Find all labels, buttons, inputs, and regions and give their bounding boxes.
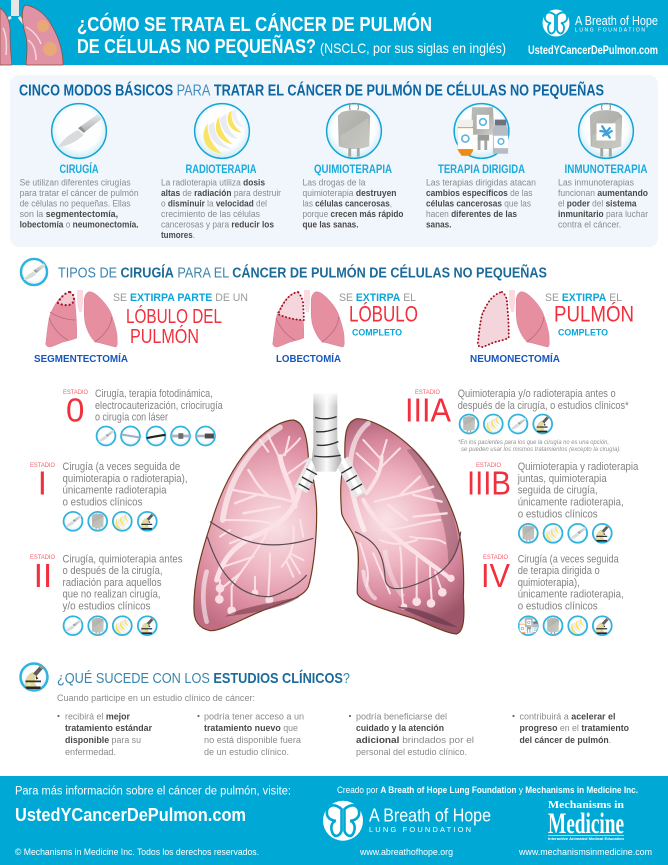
treatment: terapia dirigida bbox=[426, 104, 536, 230]
treatment icons bbox=[519, 523, 612, 543]
clinical trials benefit 2: tratamiento nuevo que bbox=[204, 723, 298, 734]
surgery: segmentectomía: SEGMENTECTOMÍA bbox=[34, 352, 128, 365]
treatment: terapia dirigida: sanas. bbox=[426, 220, 452, 230]
footnote: se pueden usar los mismos tratamientos (excepto la cirugía). bbox=[461, 446, 621, 453]
stage I: ESTADIO bbox=[30, 463, 55, 469]
treatment: quimioterapia: las células cancerosas, bbox=[302, 198, 392, 210]
stage IV: IV bbox=[481, 557, 510, 594]
stage IIIA: IIIA bbox=[405, 392, 451, 428]
treatment: cirugía: CIRUGÍA bbox=[60, 161, 99, 176]
stage II: y/o estudios clínicos bbox=[62, 601, 150, 613]
surgery: segmentectomía: SE EXTIRPA PARTE DE UN bbox=[113, 292, 248, 304]
logo: A Breath of Hope footer: LUNG FOUNDATION bbox=[369, 825, 471, 834]
treatment: inmunoterapia: funcionan aumentando bbox=[558, 188, 648, 199]
treatment: cirugía: Se utilizan diferentes cirugías bbox=[20, 178, 131, 188]
footer: more information: Para más información sobre el cáncer de pulmón, visite: bbox=[15, 786, 291, 798]
treatment icons bbox=[64, 511, 157, 531]
footer: credits: Creado por A Breath of Hope Lung Foundation y Mechanisms in Medicine Inc. bbox=[337, 785, 638, 795]
surgery: lobectomía: COMPLETO bbox=[352, 328, 402, 338]
stage 0: electrocauterización, criocirugía bbox=[95, 400, 223, 412]
stage I: Cirugía (a veces seguida de bbox=[62, 461, 180, 473]
surgery: neumonectomía: COMPLETO bbox=[558, 328, 608, 338]
stage II: Cirugía, quimioterapia antes bbox=[62, 553, 182, 565]
icon: microscope bbox=[20, 664, 48, 690]
surgery: neumonectomía bbox=[470, 290, 634, 365]
stage 0: o cirugía con láser bbox=[95, 412, 168, 424]
treatment: quimioterapia: porque crecen más rápido bbox=[302, 209, 404, 220]
surgery: segmentectomía bbox=[34, 290, 248, 365]
clinical trials benefit 4: contribuirá a acelerar el bbox=[520, 711, 615, 722]
clinical trials benefit 3: cuidado y la atención bbox=[356, 723, 444, 734]
treatment: inmunoterapia: INMUNOTERAPIA bbox=[564, 162, 648, 176]
clinical trials benefit 2: podría tener acceso a un bbox=[204, 711, 304, 722]
left lung bbox=[194, 420, 317, 631]
treatment: cirugía bbox=[20, 104, 139, 230]
stage 0: 0 bbox=[66, 392, 84, 428]
surgery: segmentectomía: LÓBULO DEL bbox=[126, 305, 222, 328]
footnote: *En los pacientes para los que la cirugía no es una opción, bbox=[458, 439, 609, 446]
stage IV: o estudios clínicos bbox=[518, 601, 598, 613]
clinical trials benefit 2: no está disponible fuera bbox=[204, 735, 302, 746]
clinical trials benefit 1: enfermedad. bbox=[65, 747, 116, 758]
logo: Mechanisms in Medicine: Medicine bbox=[548, 807, 624, 840]
surgery: neumonectomía: PULMÓN bbox=[554, 302, 634, 326]
clinical trials intro: Cuando participe en un estudio clínico de cáncer: bbox=[57, 693, 255, 704]
logo: Mechanisms in Medicine bbox=[518, 800, 652, 857]
footnote bbox=[458, 439, 621, 453]
clinical trials benefit 1: disponible para su bbox=[65, 735, 141, 746]
stage IIIB: Quimioterapia y radioterapia bbox=[518, 461, 638, 473]
logo: Mechanisms in Medicine: www.mechanismsinmedicine.com bbox=[518, 847, 652, 857]
icon: surgery heading scalpel bbox=[21, 259, 47, 285]
treatment icons bbox=[460, 414, 552, 433]
illustration: large lungs bbox=[194, 390, 464, 634]
surgery: lobectomía: LÓBULO bbox=[349, 302, 418, 326]
stage II: II bbox=[34, 557, 52, 594]
treatment: cirugía: son la segmentectomía, bbox=[20, 209, 118, 220]
stage I: I bbox=[38, 464, 47, 502]
stage 0: ESTADIO bbox=[63, 390, 88, 396]
treatment: inmunoterapia bbox=[558, 103, 649, 230]
clinical trials benefit 3: podría beneficiarse del bbox=[356, 711, 447, 722]
treatment: quimioterapia: QUIMIOTERAPIA bbox=[314, 162, 392, 176]
treatment: inmunoterapia: Las inmunoterapias bbox=[558, 178, 634, 188]
treatment: radioterapia: RADIOTERAPIA bbox=[186, 162, 257, 176]
treatment: terapia dirigida: TERAPIA DIRIGIDA bbox=[438, 162, 525, 176]
stage IV: Cirugía (a veces seguida bbox=[518, 553, 619, 565]
stage II: que no realizan cirugía, bbox=[62, 589, 160, 601]
stage 0 bbox=[63, 388, 223, 445]
treatment: cirugía: lobectomía o neumonectomía. bbox=[20, 220, 139, 230]
clinical trials benefit 1 bbox=[57, 711, 152, 758]
stage IIIB: seguida de cirugía, bbox=[518, 485, 598, 497]
clinical trials benefit 2: de un estudio clínico. bbox=[204, 747, 289, 758]
logo: A Breath of Hope footer bbox=[323, 801, 491, 857]
treatment: terapia dirigida: células cancerosas que las bbox=[426, 198, 531, 210]
clinical trials benefit 1: recibirá el mejor bbox=[65, 711, 130, 722]
stage IIIB bbox=[467, 461, 638, 543]
stage IV: ESTADIO bbox=[483, 555, 508, 561]
treatment icons bbox=[64, 616, 157, 635]
stage IIIA: después de la cirugía, o estudios clínicos* bbox=[458, 400, 629, 412]
stage IIIB: únicamente radioterapia, bbox=[518, 496, 624, 508]
title: DE CÉLULAS NO PEQUEÑAS? bbox=[77, 35, 316, 58]
surgery: lobectomía: LOBECTOMÍA bbox=[276, 352, 341, 365]
footer: more information bbox=[15, 786, 291, 825]
stage I bbox=[30, 461, 188, 531]
stage II bbox=[30, 553, 182, 635]
icon: header lungs bbox=[0, 0, 63, 65]
treatment: terapia dirigida: hacen diferentes de las bbox=[426, 209, 517, 220]
clinical trials benefit 3: personal del estudio clínico. bbox=[356, 747, 467, 758]
stage II: o después de la cirugía, bbox=[62, 565, 162, 577]
clinical trials benefit 4: del cáncer de pulmón. bbox=[520, 735, 611, 746]
treatment: radioterapia: crecimiento de las células bbox=[161, 209, 260, 220]
treatment: inmunoterapia: contra el cáncer. bbox=[558, 220, 621, 230]
stage I: o estudios clínicos bbox=[62, 496, 142, 508]
clinical trials benefit 2 bbox=[197, 711, 304, 758]
trachea and bronchi bbox=[299, 390, 362, 495]
surgery: lobectomía: SE EXTIRPA EL bbox=[339, 292, 416, 304]
treatment icons bbox=[97, 427, 215, 445]
treatment: inmunoterapia: el poder del sistema bbox=[558, 198, 637, 210]
logo: Mechanisms in Medicine: Mechanisms in bbox=[548, 800, 624, 811]
stage IIIB: ESTADIO bbox=[476, 463, 501, 469]
treatment: terapia dirigida: cambios específicos de las bbox=[426, 188, 533, 199]
surgery: neumonectomía: NEUMONECTOMÍA bbox=[470, 352, 560, 365]
stage IIIB: IIIB bbox=[467, 464, 511, 502]
footer: copyright: © Mechanisms in Medicine Inc. Todos los derechos reservados. bbox=[15, 847, 259, 857]
logo: A Breath of Hope: LUNG FOUNDATION bbox=[575, 28, 645, 34]
treatment: radioterapia: La radioterapia utiliza dosis bbox=[161, 178, 265, 188]
lung diagram: lobe removed bbox=[273, 290, 344, 347]
logo: Mechanisms in Medicine: Interactive Animated Medical Education bbox=[548, 837, 624, 841]
stage I: únicamente radioterapia bbox=[62, 485, 167, 497]
treatment: terapia dirigida: Las terapias dirigidas atacan bbox=[426, 178, 536, 188]
stage II: ESTADIO bbox=[30, 555, 55, 561]
treatment: cirugía: para tratar el cáncer de pulmón bbox=[20, 188, 139, 199]
footer: more information: UstedYCancerDePulmon.com bbox=[15, 805, 246, 825]
panel: five treatment modes bbox=[10, 75, 658, 247]
stage IV bbox=[481, 553, 624, 635]
logo: A Breath of Hope bbox=[528, 10, 658, 57]
treatment: radioterapia bbox=[161, 104, 282, 241]
stage 0: Cirugía, terapia fotodinámica, bbox=[95, 388, 213, 400]
treatment: quimioterapia: que las sanas. bbox=[302, 220, 358, 230]
surgery: neumonectomía: SE EXTIRPA EL bbox=[545, 292, 622, 304]
clinical trials heading: ¿QUÉ SUCEDE CON LOS ESTUDIOS CLÍNICOS? bbox=[57, 670, 350, 687]
treatment: radioterapia: cancerosas y para reducir los bbox=[161, 220, 274, 230]
clinical trials benefit 3: adicional brindados por el bbox=[356, 735, 474, 746]
title: ¿CÓMO SE TRATA EL CÁNCER DE PULMÓN bbox=[77, 12, 432, 36]
clinical trials benefit 1: tratamiento estándar bbox=[65, 723, 152, 734]
header band bbox=[0, 0, 668, 65]
treatment: quimioterapia: quimioterapia destruyen bbox=[302, 188, 397, 199]
stage IIIB: juntas, quimioterapia bbox=[517, 473, 607, 485]
treatment icons bbox=[519, 616, 612, 635]
title: (NSCLC, por sus siglas en inglés) bbox=[320, 40, 506, 56]
stage IV: únicamente radioterapia, bbox=[518, 589, 624, 601]
treatment: inmunoterapia: inmunitario para luchar bbox=[558, 209, 649, 220]
right lung bbox=[341, 419, 464, 634]
lung diagram: lung removed bbox=[478, 290, 549, 347]
title bbox=[77, 12, 506, 58]
surgery: lobectomía bbox=[273, 290, 418, 365]
clinical trials benefit 4 bbox=[512, 711, 629, 746]
stage IIIB: o estudios clínicos bbox=[518, 508, 598, 520]
clinical trials benefit 4: progreso en el tratamiento bbox=[520, 723, 629, 734]
footer band bbox=[0, 776, 668, 865]
treatment: quimioterapia: Las drogas de la bbox=[302, 178, 366, 188]
stage II: radiación para aquellos bbox=[62, 577, 162, 589]
treatment: radioterapia: o disminuir la velocidad del bbox=[161, 198, 267, 210]
stage IV: de terapia dirigida o bbox=[518, 565, 600, 577]
stage IV: quimioterapia), bbox=[518, 577, 580, 589]
logo: A Breath of Hope footer: A Breath of Hope bbox=[369, 806, 491, 826]
stage IIIA bbox=[405, 388, 629, 453]
treatment: cirugía: de células no pequeñas. Ellas bbox=[20, 198, 131, 210]
treatment: radioterapia: tumores. bbox=[161, 230, 195, 241]
logo: A Breath of Hope footer: www.abreathofhope.org bbox=[359, 847, 453, 857]
surgery heading: TIPOS DE CIRUGÍA PARA EL CÁNCER DE PULMÓN DE CÉLULAS NO PEQUEÑAS bbox=[58, 264, 547, 282]
stage IIIA: Quimioterapia y/o radioterapia antes o bbox=[458, 388, 616, 400]
surgery: segmentectomía: PULMÓN bbox=[130, 325, 199, 348]
clinical trials benefit 3 bbox=[349, 711, 474, 758]
treatment: radioterapia: altas de radiación para destruir bbox=[161, 188, 282, 199]
stage I: quimioterapia o radioterapia), bbox=[62, 473, 188, 485]
lung diagram: segment removed bbox=[46, 290, 117, 347]
treatment: quimioterapia bbox=[302, 103, 404, 230]
stage IIIA: ESTADIO bbox=[415, 390, 440, 396]
